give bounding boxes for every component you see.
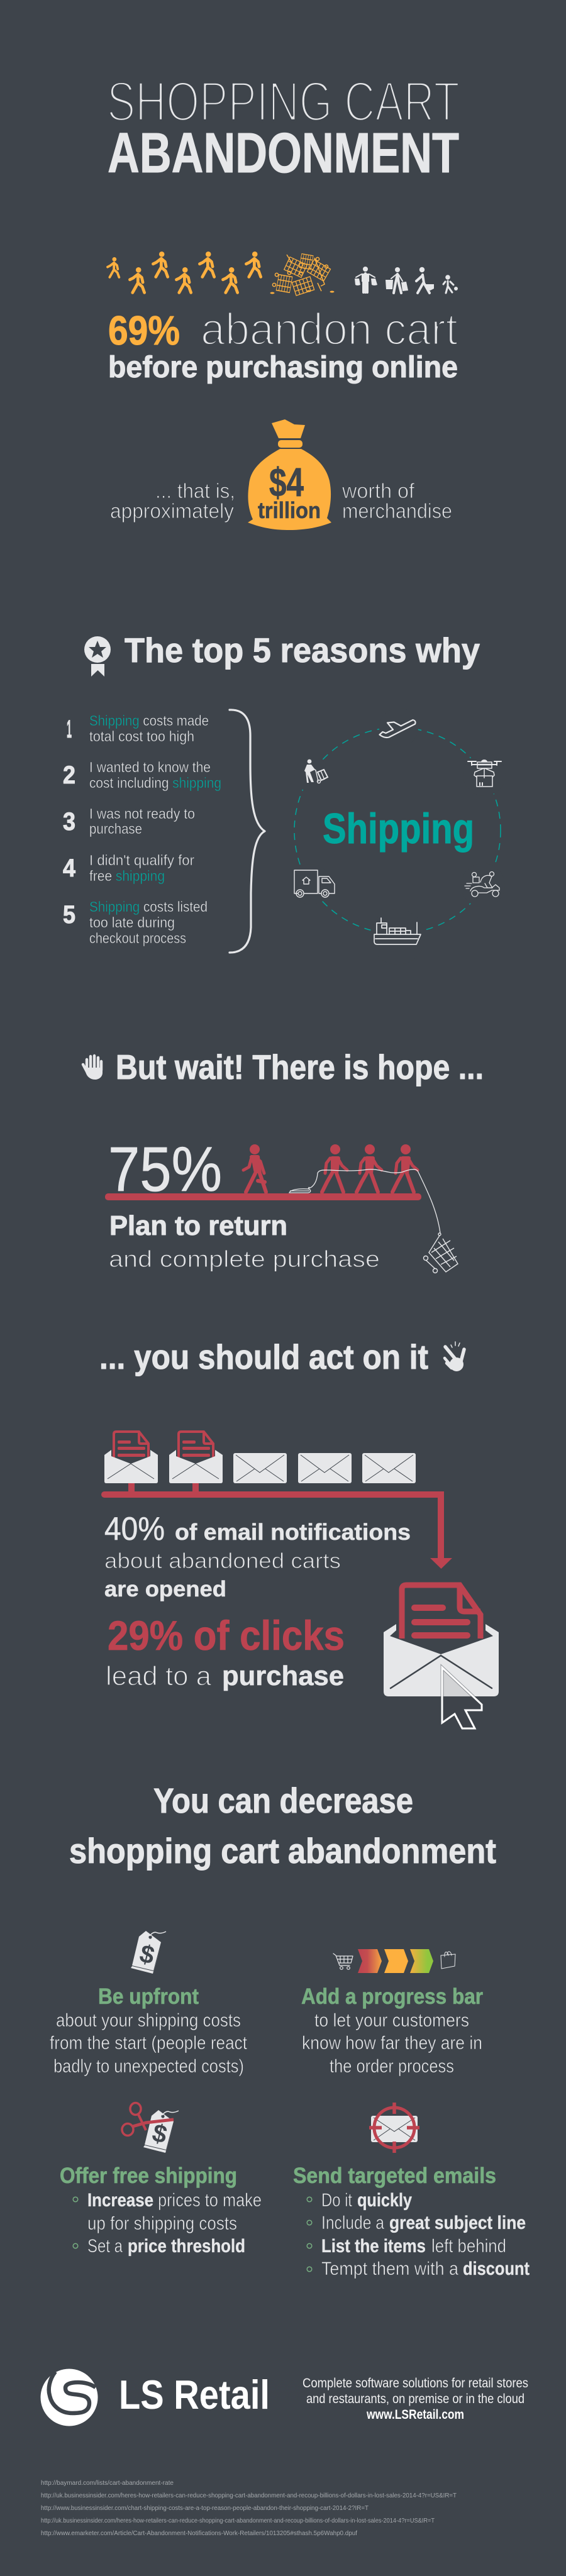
icon: opened emails — [104, 1432, 223, 1483]
list: reasons — [63, 712, 221, 946]
sources: http://uk.businessinsider.com/heres-how-retailers-can-reduce-shopping-cart-abandonment-and-recoup-billions-of-dollars-in-lost-sales-2014-4?r=US&IR=T — [41, 2492, 457, 2499]
brace — [230, 710, 265, 953]
panel: be upfront — [50, 1931, 248, 2077]
icon: drone — [468, 760, 501, 787]
tagline — [302, 2376, 528, 2422]
stat: 29 percent: 29% of clicks — [108, 1612, 345, 1659]
before purchasing online: before purchasing online — [108, 351, 458, 384]
icon: container ship — [374, 918, 421, 944]
icon: LS Retail logo — [40, 2369, 98, 2426]
reason 4 — [63, 852, 194, 884]
icon: closed emails — [233, 1453, 416, 1483]
reason 2 — [63, 759, 221, 791]
icon: target on email — [369, 2103, 419, 2153]
heading text: The top 5 reasons why — [125, 631, 480, 670]
body text: about your shipping costs — [56, 2010, 241, 2031]
red bar — [105, 1193, 421, 1200]
icon: dragged cart — [424, 1233, 458, 1273]
reason 2: cost including shipping — [89, 775, 221, 791]
stat: 40 percent: are opened — [104, 1577, 226, 1601]
bullet list: Set a — [87, 2236, 123, 2257]
body text — [50, 2010, 248, 2077]
title — [107, 70, 460, 185]
icon: medal — [84, 636, 111, 677]
$4: $4 — [269, 460, 304, 505]
icon: mouse cursor — [442, 1667, 482, 1728]
rope — [309, 1169, 440, 1233]
bullet list: discount — [463, 2258, 530, 2279]
title line 2: ABANDONMENT — [108, 122, 459, 185]
icon: raised hand — [83, 1056, 103, 1080]
shipping word: Shipping — [323, 805, 474, 853]
arrow: connector to big envelope — [101, 1483, 452, 1569]
sources — [41, 2479, 457, 2537]
stat: 40 percent: 40% — [104, 1511, 165, 1547]
dashed circle — [294, 727, 501, 934]
icon: pile of carts — [270, 254, 335, 296]
heading: Be upfront — [98, 1984, 199, 2009]
reason 5: 5 — [63, 901, 75, 929]
reason 1: total cost too high — [89, 728, 194, 744]
stat: 75 percent plan to return — [105, 1134, 458, 1273]
reason 3 — [63, 805, 195, 837]
reason 2: I wanted to know the — [89, 759, 211, 775]
icon: big open envelope with document — [384, 1585, 499, 1696]
panel: add a progress bar — [301, 1949, 483, 2077]
and complete purchase: and complete purchase — [109, 1246, 380, 1272]
bullet list: left behind — [431, 2236, 506, 2257]
stat: 40 percent — [104, 1511, 411, 1601]
icon: rope coil — [289, 1187, 311, 1193]
left caption: approximately — [110, 499, 234, 522]
heading: you can decrease shopping cart abandonment: shopping cart abandonment — [69, 1831, 496, 1871]
heading: Add a progress bar — [301, 1984, 483, 2009]
email funnel — [101, 1432, 499, 1728]
bullet list — [73, 2190, 262, 2257]
bullet list: up for shipping costs — [87, 2213, 237, 2234]
money bag callout — [110, 419, 452, 530]
heading: the top 5 reasons why — [84, 631, 480, 677]
heading: you can decrease shopping cart abandonment: You can decrease — [153, 1781, 413, 1820]
left caption — [110, 479, 235, 522]
right caption — [341, 479, 452, 522]
heading: you can decrease shopping cart abandonment — [69, 1781, 496, 1871]
reason 1: Shipping costs made — [89, 712, 209, 729]
wordmark: LS Retail — [119, 2372, 270, 2418]
shipping diagram — [291, 708, 506, 965]
sources: http://www.businessinsider.com/chart-shipping-costs-are-a-top-reason-people-abandon-their-shopping-cart-2014-2?IR=T — [41, 2504, 369, 2512]
icon: scissors cutting price tag — [122, 2103, 179, 2153]
icon: shoppers with bags — [355, 267, 458, 293]
stat: 40 percent: of email notifications — [175, 1519, 411, 1545]
icon: people pulling rope — [322, 1144, 418, 1192]
reason 5 — [63, 898, 208, 946]
right caption: merchandise — [342, 499, 452, 522]
walkers and abandoned carts illustration — [108, 252, 458, 296]
reason 4: free shipping — [89, 868, 165, 884]
icon: plane — [380, 720, 416, 738]
sources: http://www.emarketer.com/Article/Cart-Abandonment-Notifications-Work-Retailers/1013205#sthash.5p6Wahp0.dpuf — [41, 2529, 357, 2537]
heading: you should act on it — [99, 1337, 464, 1376]
heading text: ... you should act on it — [99, 1337, 428, 1376]
reason 3: purchase — [89, 821, 142, 837]
body text: the order process — [330, 2056, 454, 2077]
abandon cart text: abandon cart — [201, 305, 458, 355]
reason 5: Shipping costs listed — [89, 898, 208, 915]
stat: 29 percent — [106, 1612, 345, 1691]
bullet list: Increase — [87, 2190, 153, 2211]
tagline: Complete software solutions for retail stores — [302, 2376, 528, 2391]
bullet list: great subject line — [389, 2213, 526, 2233]
reason 1: 1 — [67, 716, 72, 743]
reason 3: 3 — [63, 808, 75, 836]
icon: price tag — [131, 1931, 166, 1974]
icon: delivery truck — [294, 870, 335, 897]
reason 2: 2 — [63, 761, 75, 789]
panel: offer free shipping — [60, 2103, 262, 2257]
tagline: and restaurants, on premise or in the cloud — [306, 2392, 524, 2406]
reason 1 — [67, 712, 209, 744]
icon: walking person — [243, 1144, 266, 1192]
75 percent: 75% — [108, 1134, 222, 1205]
body text: know how far they are in — [302, 2033, 482, 2054]
left caption: ... that is, — [155, 479, 235, 502]
icon: progress chevrons — [333, 1949, 455, 1973]
reason 5: checkout process — [89, 930, 186, 946]
69 percent number: 69% — [108, 307, 180, 353]
stat: 29 percent: lead to a — [106, 1661, 211, 1691]
tagline: www.LSRetail.com — [366, 2407, 464, 2422]
icon: money bag — [248, 419, 331, 530]
body text: badly to unexpected costs) — [53, 2056, 244, 2077]
plan to return: Plan to return — [109, 1210, 287, 1241]
panel: send targeted emails — [293, 2103, 530, 2279]
body text: from the start (people react — [50, 2033, 248, 2054]
title line 1: SHOPPING CART — [107, 70, 460, 133]
bullet list: Include a — [321, 2213, 384, 2233]
bullet list: prices to make — [158, 2190, 262, 2211]
reason 4: I didn't qualify for — [89, 852, 194, 868]
right caption: worth of — [341, 479, 415, 502]
icon: person with hand truck — [304, 760, 328, 783]
stat: 69% abandon cart — [108, 305, 458, 384]
bullet list: price threshold — [128, 2236, 245, 2257]
bullet list: List the items — [321, 2236, 426, 2257]
bullet list: Do it — [321, 2190, 353, 2211]
icon: scooter courier — [465, 871, 499, 897]
bullet list: quickly — [357, 2190, 412, 2211]
body text: to let your customers — [314, 2010, 469, 2031]
reason 5: too late during — [89, 914, 175, 931]
icon: walking shoppers — [108, 252, 261, 292]
stat: 29 percent: purchase — [222, 1661, 344, 1691]
trillion: trillion — [258, 497, 321, 523]
reason 3: I was not ready to — [89, 805, 195, 822]
sources: http://uk.businessinsider.com/heres-how-retailers-can-reduce-shopping-cart-abandonment-and-recoup-billions-of-dollars-in-lost-sales-2014-4?r=US&IR=T — [41, 2517, 435, 2524]
icon: finger snap — [445, 1342, 464, 1371]
stat: 40 percent: about abandoned carts — [104, 1549, 341, 1573]
heading: but wait there is hope — [83, 1048, 484, 1086]
body text — [302, 2010, 482, 2077]
bullet list: Tempt them with a — [321, 2258, 458, 2279]
footer: LS Retail brand — [40, 2369, 528, 2426]
reason 4: 4 — [63, 854, 76, 882]
heading: Offer free shipping — [60, 2164, 237, 2188]
sources: http://baymard.com/lists/cart-abandonment-rate — [41, 2479, 174, 2487]
heading: Send targeted emails — [293, 2164, 496, 2188]
heading text: But wait! There is hope ... — [116, 1048, 484, 1086]
bullet list — [307, 2190, 530, 2279]
